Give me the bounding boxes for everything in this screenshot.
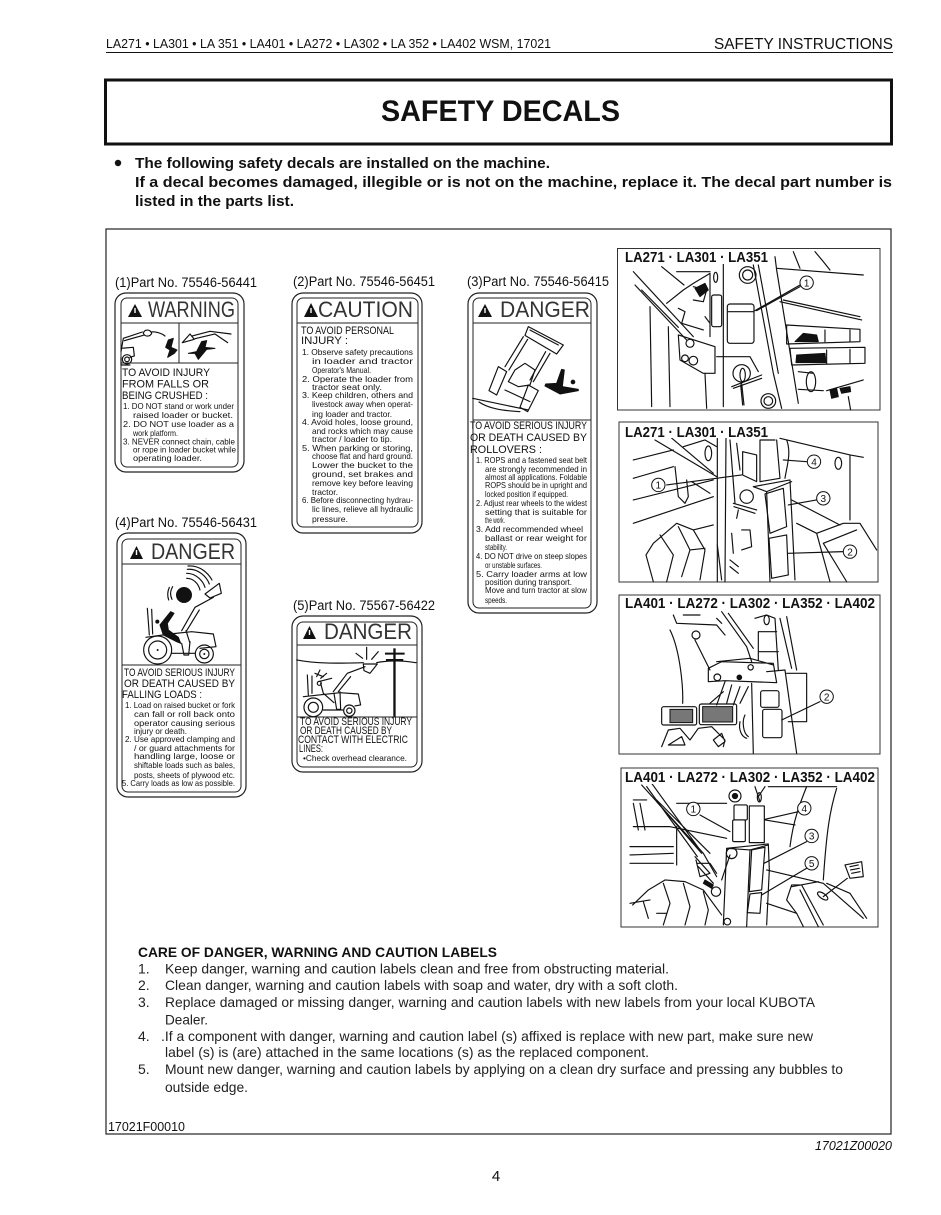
callout number 2: 2 <box>824 692 830 703</box>
danger rollovers text <box>470 420 588 605</box>
caution text: 1. Observe safety precautions <box>302 347 413 357</box>
warning text: TO AVOID INJURY <box>122 367 210 379</box>
part number labels: (1)Part No. 75546-56441 <box>115 275 257 290</box>
care list: label (s) is (are) attached in the same locations (s) as the replaced component. <box>165 1044 649 1060</box>
danger rollovers text: 4. DO NOT drive on steep slopes <box>476 551 587 561</box>
caution text: choose flat and hard ground. <box>312 451 413 461</box>
callout number 4 <box>783 455 821 468</box>
danger falling loads text: 1. Load on raised bucket or fork <box>125 700 236 710</box>
callout number 4 <box>765 802 811 819</box>
callout number 1 <box>652 475 742 492</box>
danger rollovers text: TO AVOID SERIOUS INJURY <box>470 420 587 432</box>
danger rollovers text: 2. Adjust rear wheels to the widest <box>476 498 588 508</box>
page number: 4 <box>492 1168 500 1185</box>
caution text: tractor / loader to tip. <box>312 434 392 444</box>
danger rollovers text: ROPS should be in upright and <box>485 480 587 490</box>
callout number 2 <box>782 690 833 720</box>
callout number 3: 3 <box>809 832 815 843</box>
page header: LA271 • LA301 • LA 351 • LA401 • LA272 • LA302 • LA 352 • LA402 WSM, 17021 <box>106 37 551 51</box>
danger rollovers text: speeds. <box>485 595 507 605</box>
callout number 1 <box>687 802 730 832</box>
part number labels: (2)Part No. 75546-56451 <box>293 274 435 289</box>
care list: 2. <box>138 977 150 993</box>
location diagram 4: LA401 LA272 LA302 LA352 LA402 <box>621 768 878 927</box>
danger rollovers text: or unstable surfaces. <box>485 560 542 570</box>
intro text <box>115 155 892 210</box>
care list: 4. <box>138 1028 150 1044</box>
decal 5: danger electric lines <box>292 616 422 772</box>
pictogram: tractor rollover <box>473 327 578 412</box>
decal 3: danger rollovers <box>468 293 597 613</box>
care list: 5. <box>138 1061 150 1077</box>
caution text: INJURY : <box>301 335 348 347</box>
title box <box>106 80 892 144</box>
callout number 3 <box>788 492 830 505</box>
callout number 4: 4 <box>802 804 808 815</box>
warning text <box>122 367 236 463</box>
location diagram 1: LA271 LA301 LA351: LA271 · LA301 · LA351 <box>625 249 768 266</box>
caution text: ground, set brakes and <box>312 469 413 479</box>
title box: SAFETY DECALS <box>381 95 620 128</box>
danger rollovers text: ROLLOVERS : <box>470 444 542 456</box>
caution text: ing loader and tractor. <box>312 409 392 419</box>
caution text: pressure. <box>312 514 348 524</box>
care instructions <box>138 944 843 1095</box>
intro text: The following safety decals are installed on the machine. <box>135 155 550 172</box>
danger electric lines text: TO AVOID SERIOUS INJURY <box>300 716 412 728</box>
caution text: TO AVOID PERSONAL <box>301 325 394 337</box>
warning text: 1. DO NOT stand or work under <box>123 401 234 411</box>
figure code right: 17021Z00020 <box>815 1138 893 1153</box>
caution text: lic lines, relieve all hydraulic <box>312 504 413 514</box>
intro text: If a decal becomes damaged, illegible or is not on the machine, replace it. The decal part number is <box>135 174 892 191</box>
danger electric lines text: CONTACT WITH ELECTRIC <box>298 734 408 746</box>
callout number 1: 1 <box>691 805 697 816</box>
warning text: or rope in loader bucket while <box>133 444 236 454</box>
location diagram 3: LA401 LA272 LA302 LA352 LA402 <box>619 595 880 754</box>
main frame <box>106 229 891 1134</box>
caution text: livestock away when operat- <box>312 399 413 409</box>
location diagram 4: LA401 LA272 LA302 LA352 LA402: LA401 · LA272 · LA302 · LA352 · LA402 <box>625 769 875 786</box>
decal 2: caution <box>292 293 422 533</box>
intro text: listed in the parts list. <box>135 193 294 210</box>
page header <box>106 36 893 53</box>
callout number 1: 1 <box>656 481 662 492</box>
danger falling loads text: posts, sheets of plywood etc. <box>134 770 235 780</box>
danger rollovers text: almost all applications. Foldable <box>485 472 587 482</box>
callout number 1 <box>757 276 813 311</box>
location diagram 2: LA271 LA301 LA351 <box>619 422 878 582</box>
warning text: BEING CRUSHED : <box>122 390 208 402</box>
care list: Keep danger, warning and caution labels clean and free from obstructing material. <box>165 960 669 976</box>
danger falling loads text: FALLING LOADS : <box>122 689 202 701</box>
caution text: tractor seat only. <box>312 382 382 392</box>
danger electric lines text: •Check overhead clearance. <box>303 753 407 763</box>
danger rollovers text: OR DEATH CAUSED BY <box>470 432 587 444</box>
care list: 3. <box>138 994 150 1010</box>
pictogram: falling load on tractor <box>144 566 221 664</box>
danger rollovers text: 1. ROPS and a fastened seat belt <box>476 455 588 465</box>
figure code left: 17021F00010 <box>108 1119 185 1134</box>
callout number 3: 3 <box>821 494 827 505</box>
location diagram 1: LA271 LA301 LA351 <box>618 248 880 410</box>
care list: Dealer. <box>165 1012 208 1028</box>
danger falling loads text: / or guard attachments for <box>134 743 235 753</box>
danger rollovers text: are strongly recommended in <box>485 464 587 474</box>
page header: SAFETY INSTRUCTIONS <box>714 36 893 53</box>
location diagram 2: LA271 LA301 LA351: LA271 · LA301 · LA351 <box>625 424 768 441</box>
caution text: remove key before leaving <box>312 478 413 488</box>
callout number 5 <box>762 857 818 895</box>
warning text: FROM FALLS OR <box>122 378 209 390</box>
danger falling loads text: handling large, loose or <box>134 751 235 761</box>
decal 4: danger falling loads <box>117 533 246 797</box>
warning text: raised loader or bucket. <box>133 410 233 420</box>
danger heading: DANGER <box>324 619 412 644</box>
danger falling loads text <box>122 667 236 788</box>
warning text: work platform. <box>132 428 178 438</box>
part number labels: (4)Part No. 75546-56431 <box>115 515 257 530</box>
care heading: CARE OF DANGER, WARNING AND CAUTION LABELS <box>138 944 497 960</box>
care list <box>138 960 843 1095</box>
danger rollovers text: 3. Add recommended wheel <box>476 524 583 534</box>
danger rollovers text: the work. <box>485 515 505 525</box>
danger triangle icon <box>303 626 316 639</box>
caution text: in loader and tractor <box>312 356 413 366</box>
danger rollovers text: position during transport. <box>485 577 572 587</box>
danger triangle icon <box>478 304 492 317</box>
warning text: 3. NEVER connect chain, cable <box>123 436 235 446</box>
caution text <box>301 325 413 524</box>
danger falling loads text: operator causing serious <box>134 718 235 728</box>
care list: outside edge. <box>165 1079 248 1095</box>
danger rollovers text: stability. <box>485 542 507 552</box>
callout number 3 <box>764 829 818 863</box>
callout number 5: 5 <box>809 859 815 870</box>
callout number 4: 4 <box>811 457 817 468</box>
part number labels <box>115 274 609 613</box>
danger triangle icon <box>130 546 143 559</box>
callout number 2: 2 <box>847 547 853 558</box>
danger falling loads text: 2. Use approved clamping and <box>125 734 235 744</box>
caution text: 3. Keep children, others and <box>302 390 413 400</box>
caution text: 2. Operate the loader from <box>302 374 413 384</box>
danger falling loads text: can fall or roll back onto <box>134 709 235 719</box>
warning heading: WARNING <box>148 297 235 322</box>
care list: .If a component with danger, warning and caution label (s) affixed is replace with new part, make sure new <box>161 1028 814 1044</box>
part number labels: (3)Part No. 75546-56415 <box>467 274 609 289</box>
danger electric lines text: OR DEATH CAUSED BY <box>300 725 392 737</box>
caution triangle icon <box>304 303 318 317</box>
location diagram 3: LA401 LA272 LA302 LA352 LA402: LA401 · LA272 · LA302 · LA352 · LA402 <box>625 595 875 612</box>
callout number 1: 1 <box>804 278 810 289</box>
caution heading: CAUTION <box>318 297 413 322</box>
danger falling loads text: injury or death. <box>134 726 187 736</box>
caution text: tractor. <box>312 487 338 497</box>
danger heading: DANGER <box>151 539 235 564</box>
care list: Replace damaged or missing danger, warning and caution labels with new labels from your local KUBOTA <box>165 994 816 1010</box>
caution text: 5. When parking or storing, <box>302 443 413 453</box>
part number labels: (5)Part No. 75567-56422 <box>293 598 435 613</box>
caution text: 4. Avoid holes, loose ground, <box>302 417 413 427</box>
pictogram: tractor at power line <box>297 647 416 717</box>
caution text: and rocks which may cause <box>312 426 413 436</box>
danger heading: DANGER <box>500 297 590 322</box>
danger electric lines text <box>298 716 412 763</box>
decal 1: warning <box>115 293 244 472</box>
warning text: operating loader. <box>133 453 202 463</box>
caution text: Operator's Manual. <box>312 365 371 375</box>
care list: Mount new danger, warning and caution labels by applying on a clean dry surface and pressing any bubbles to <box>165 1061 843 1077</box>
danger electric lines text: LINES: <box>299 743 323 755</box>
danger rollovers text: locked position if equipped. <box>485 489 568 499</box>
caution text: 6. Before disconnecting hydrau- <box>302 495 413 505</box>
pictograms: falling and crushed <box>121 330 231 365</box>
caution text: Lower the bucket to the <box>312 460 413 470</box>
danger rollovers text: 5. Carry loader arms at low <box>476 569 588 579</box>
danger falling loads text: OR DEATH CAUSED BY <box>124 678 235 690</box>
care list: Clean danger, warning and caution labels with soap and water, dry with a soft cloth. <box>165 977 678 993</box>
warning text: 2. DO NOT use loader as a <box>123 419 234 429</box>
danger falling loads text: TO AVOID SERIOUS INJURY <box>124 667 235 679</box>
callout number 2 <box>788 545 857 558</box>
danger rollovers text: ballast or rear weight for <box>485 533 587 543</box>
danger falling loads text: 5. Carry loads as low as possible. <box>122 778 235 788</box>
danger rollovers text: Move and turn tractor at slow <box>485 585 588 595</box>
care list: 1. <box>138 960 150 976</box>
warning triangle icon <box>128 304 142 317</box>
danger falling loads text: shiftable loads such as bales, <box>134 760 235 770</box>
danger rollovers text: setting that is suitable for <box>485 507 587 517</box>
